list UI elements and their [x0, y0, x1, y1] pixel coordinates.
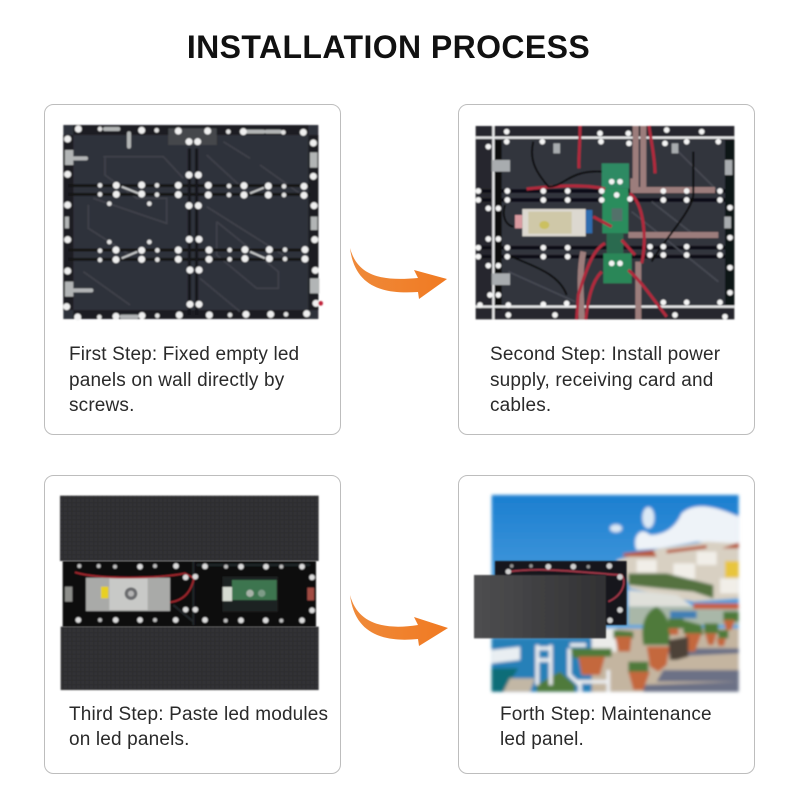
text: fourth step: Forth Step: Maintenance	[500, 704, 712, 725]
text: fourth step: led panel.	[500, 729, 584, 750]
panel: first step	[44, 104, 340, 434]
panel: second step	[458, 104, 754, 434]
text: third step	[69, 704, 328, 750]
text: second step: cables.	[490, 395, 551, 416]
text: second step: Second Step: Install power	[490, 344, 721, 365]
text: first step: screws.	[69, 395, 135, 416]
text: first step: First Step: Fixed empty led	[69, 344, 299, 365]
led module being removed	[474, 575, 606, 638]
top led module	[60, 496, 319, 561]
panel: third step	[44, 476, 340, 774]
image: empty led panel back	[63, 125, 323, 319]
exposed panel	[495, 561, 627, 625]
image: maintenance over seaside photo	[474, 495, 739, 692]
text: first step: panels on wall directly by	[69, 370, 285, 391]
bottom led module	[61, 627, 319, 690]
image: panel with power supply, receiving card and cables	[476, 126, 734, 319]
text: first step	[69, 344, 299, 416]
arrow: third to fourth	[350, 595, 448, 646]
text: third step: on led panels.	[69, 729, 190, 750]
arrow: first to second	[350, 248, 447, 299]
panel: fourth step	[458, 476, 754, 774]
title: INSTALLATION PROCESS	[187, 29, 590, 65]
text: second step	[490, 344, 721, 416]
text: second step: supply, receiving card and	[490, 370, 714, 391]
text: fourth step	[500, 704, 712, 750]
exposed panel strip	[63, 561, 316, 627]
text: third step: Third Step: Paste led modules	[69, 704, 328, 725]
image: led modules pasted on panel	[60, 496, 319, 690]
